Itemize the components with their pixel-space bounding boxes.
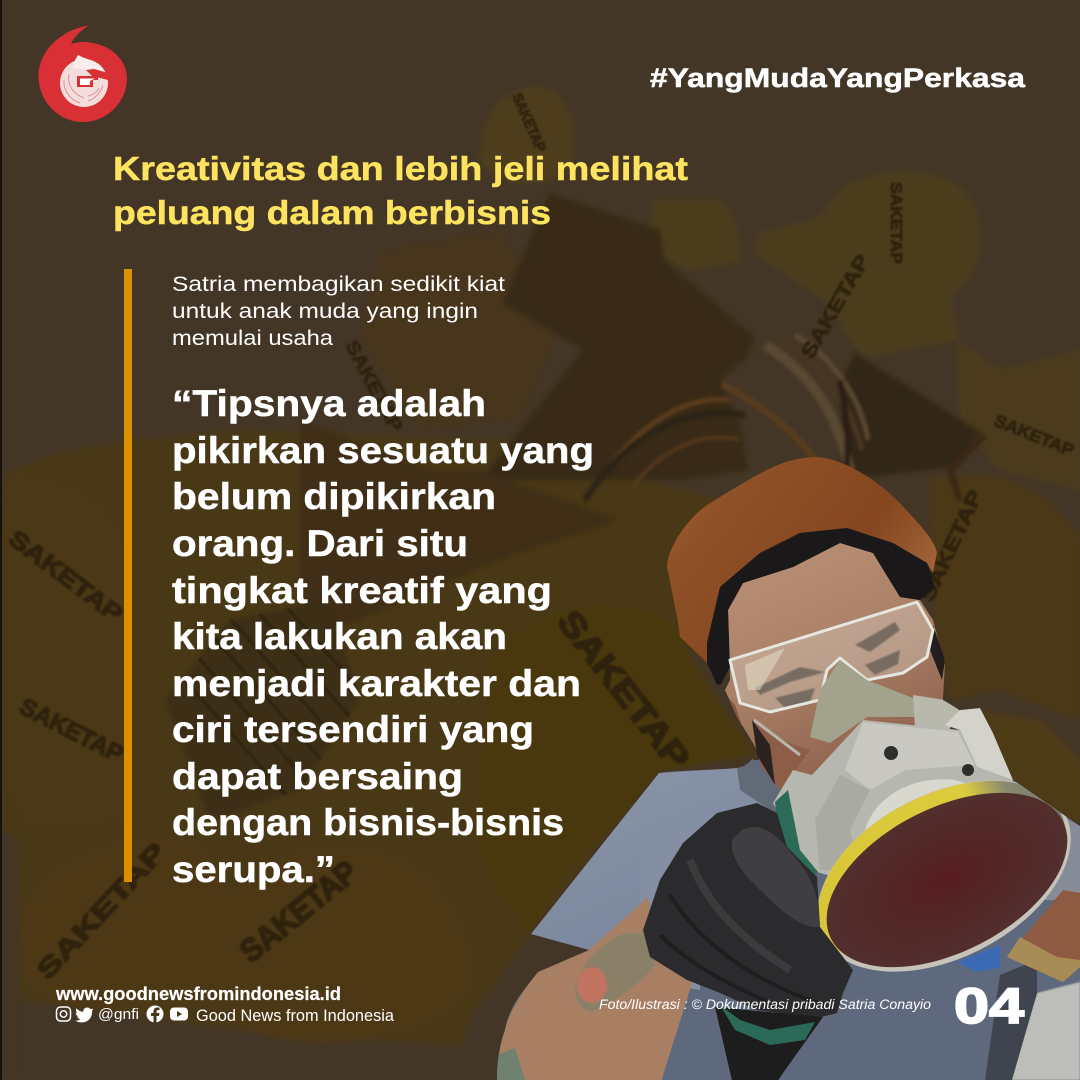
quote: orang. Dari situ [172,523,468,564]
footer: website and social: www.goodnewsfromindonesia.id [55,984,341,1004]
hat [667,457,937,663]
hashtag: #YangMudaYangPerkasa [650,63,1026,93]
green band [720,1005,815,1045]
background key tag engraved marks: SAKETAP [15,693,127,768]
background key tag engraved marks: SAKETAP [797,251,874,362]
wooden block [1007,890,1080,982]
grinder handle [715,1007,823,1080]
intro text: untuk anak muda yang ingin [172,300,478,323]
background key tag engraved marks: SAKETAP [341,337,406,435]
logo: GNFI [38,26,127,122]
background key tag engraved marks: SAKETAP [992,411,1077,460]
background key tag engraved marks: SAKETAP [917,487,987,605]
quote: belum dipikirkan [172,476,496,517]
quote: serupa.” [172,849,335,890]
icon: youtube [170,1008,188,1020]
footer: website and social [55,984,395,1025]
heading [113,150,688,231]
grinder body [773,708,1013,890]
quote: kita lakukan akan [172,616,507,657]
icon: facebook [146,1006,164,1023]
social handle: @gnfi [98,1006,139,1023]
quote: “Tipsnya adalah [172,383,486,424]
shirt [490,758,1080,1080]
glove [643,803,853,1018]
photo credit: Foto/Ilustrasi : © Dokumentasi pribadi Satria Conayio [599,997,932,1012]
intro text [172,273,505,350]
quote: dapat bersaing [172,756,463,797]
heading: Kreativitas dan lebih jeli melihat [113,150,688,187]
safety goggles [730,602,933,712]
background key tag engraved marks: SAKETAP [887,182,904,264]
hair [707,528,935,690]
background key tag engraved marks: SAKETAP [550,604,697,777]
quote: ciri tersendiri yang [172,709,534,750]
quote: pikirkan sesuatu yang [172,430,594,471]
quote: menjadi karakter dan [172,663,581,704]
forearm with tattoo [490,897,692,1080]
page number: 04 [954,978,1024,1034]
background key tag engraved marks: SAKETAP [30,837,172,985]
quote: tingkat kreatif yang [172,570,552,611]
vertical accent bar [124,269,132,882]
icon: instagram [56,1007,70,1021]
intro text: Satria membagikan sedikit kiat [172,273,505,296]
background key tag engraved marks: SAKETAP [233,853,364,969]
intro text: memulai usaha [172,327,333,350]
face [725,543,945,788]
photo: craftsman with grinder [490,457,1080,1080]
background key tag engraved marks: SAKETAP [3,525,127,628]
quote: dengan bisnis-bisnis [172,802,564,843]
respirator mask [810,660,917,743]
eyebrows and eyes [755,622,900,708]
heading: peluang dalam berbisnis [113,194,551,231]
background key tag engraved marks: SAKETAP [508,91,549,154]
sanding disc [818,780,1071,972]
brand name: Good News from Indonesia [196,1006,395,1025]
left edge strip [0,0,2,1080]
quote [172,383,594,890]
icon: twitter [75,1008,93,1022]
